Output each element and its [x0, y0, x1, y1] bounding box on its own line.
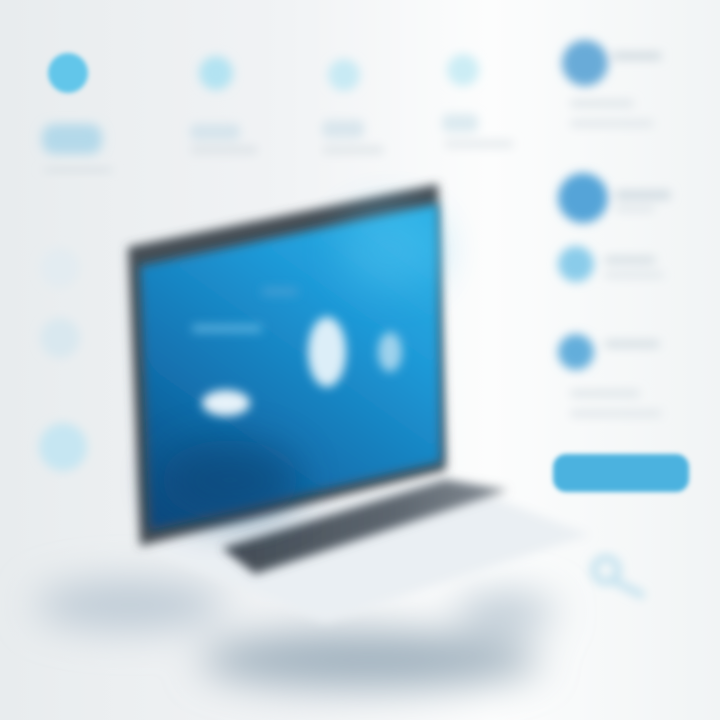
item 3	[558, 246, 664, 282]
laptop	[128, 184, 590, 622]
top row of icons and text	[42, 53, 514, 174]
left column of icons	[39, 248, 87, 471]
screen content	[192, 288, 402, 416]
button	[553, 454, 689, 492]
keyboard deck	[222, 480, 508, 574]
item 1	[562, 40, 662, 127]
right figure	[378, 332, 402, 372]
text lines	[192, 325, 262, 332]
screen display	[140, 204, 441, 530]
feature 3	[322, 59, 384, 154]
screen bezel	[128, 184, 446, 546]
feature 4	[442, 54, 514, 148]
floor shadow	[35, 581, 555, 688]
screen dark corner	[160, 440, 300, 520]
laptop base	[148, 478, 590, 622]
feature 2	[190, 56, 258, 154]
central oval	[308, 317, 346, 387]
cloud shape	[202, 390, 250, 416]
right column of items	[553, 40, 689, 596]
item 2	[558, 173, 671, 223]
bottom icon	[594, 558, 644, 596]
screen glow	[340, 210, 440, 290]
feature 1	[42, 53, 112, 174]
item 4	[558, 334, 662, 417]
